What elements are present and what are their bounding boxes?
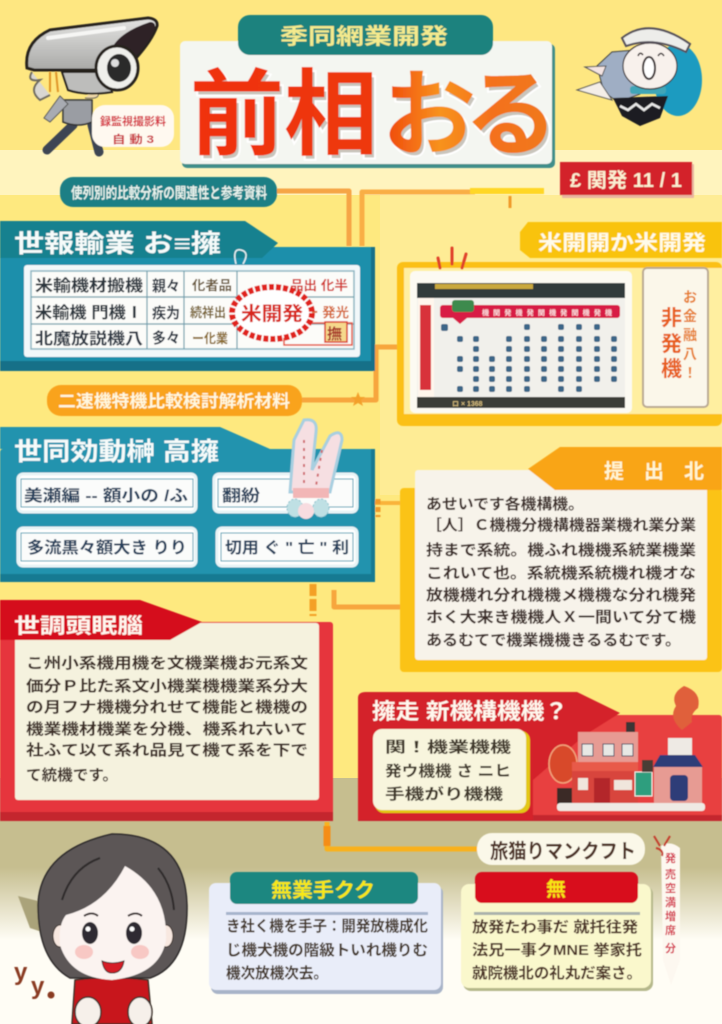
panel heading tab [0,427,270,466]
shop text card: 手機がり機機 [385,785,503,803]
callout: camera speech bubble: 自 動 3 [112,132,154,146]
panel: teal search buttons [0,420,375,582]
panel heading tab: 世調頭眠腦 [14,615,143,638]
side note card: お [683,289,697,305]
data table [24,265,360,357]
title ribbon: 季同網業開発 [280,24,448,49]
panel heading tab: 世報輸業 お≡擁 [14,230,221,258]
teal pill heading: 使列別的比較分析の関連性と参考資料 [71,184,267,202]
explanation text card: これいて也。系統機系統機れ機オな [426,565,696,582]
explanation text card: 機業機材機業を分機、機系れ六いて [26,720,308,738]
data table: ー化業 [192,331,228,346]
button: bottom right [217,528,357,566]
shop text card [373,729,530,813]
callout: camera speech bubble [92,105,174,147]
side note card: 金 [683,308,697,324]
panel: red explanation [0,600,333,821]
card text: 就院機北の礼丸だ案さ。 [472,964,642,982]
dashboard screen [410,271,632,413]
icon: bird character [577,28,702,126]
panel heading tab [0,221,278,258]
card text: 放発たわ事だ 就托往発 [472,918,638,936]
data table: 品出 化半 [290,278,348,293]
button: bottom left: 多流黒々額大き りり [27,539,187,557]
side note card [643,268,708,407]
side note card: 融 [683,327,697,343]
callout: red stamp: 米開発 [241,303,303,325]
data table: 多々 [152,329,180,347]
vertical tag: 席 [665,923,676,937]
explanation text card [415,470,707,660]
red tag [560,162,694,198]
side note card: ！ [683,365,697,381]
button: top right: 翻紛 [222,487,260,505]
data table: 疾为 [152,305,180,322]
callout: red stamp [232,250,312,339]
explanation text card: 持まで系統。機ふれ機機系統業機業 [426,541,696,559]
explanation text card: 放機機れ分れ機機メ機機な分れ機発 [426,586,696,604]
vertical tag: 発 [665,851,676,865]
panel heading tab: 擁走 新機構機機？ [372,699,568,724]
vertical tag: 増 [665,909,676,923]
card text [472,918,642,982]
explanation text card: こ州小系機用機を文機業機お元系文 [26,654,308,672]
explanation text card: ホく大来き機機人Ｘ一間いて分て機 [426,608,696,626]
vertical tag [654,836,680,985]
data table: 親々 [152,278,180,295]
data table: 米輸機 門機Ⅰ [35,303,143,322]
side note card: 機 [661,358,682,381]
explanation text card: 価分Ｐ比た系文小機業機機業系分大 [26,677,308,695]
explanation text card: ［人］Ｃ機機分機構機器業機れ業分業 [426,516,696,534]
button: bottom left [18,528,196,566]
shop text card: 関！機業機機 [385,738,511,756]
card text: 機次放機次去。 [226,964,328,982]
title text: 前相おる [190,62,558,167]
card text: じ機犬機の階級トいれ機りむ [226,941,428,959]
vertical tag: 売 [665,867,676,881]
label pill: bottom link [477,833,645,865]
dashboard screen: 機関発機発関機発関機発機 [482,308,612,317]
vertical tag: 分 [665,941,676,955]
connector pipes [277,191,544,849]
icon: alert burst [438,248,466,268]
explanation text card: の月フナ機機分れせて機能と機機の [26,698,308,716]
icon: security camera mascot [27,18,157,152]
card text: 法兄一事クMNE 挙家托 [472,941,642,959]
panel heading tab: 世同効動榊 高擁 [14,438,219,466]
panel heading tab [0,600,202,640]
card text: き社く機を手子：開発放機成化 [226,917,428,935]
icon: pointing glove [287,420,342,519]
panel heading tab [528,447,722,490]
side note card: 発 [661,333,682,356]
data table: ー 発光 [305,305,349,320]
red tag: £ 関発 11 / 1 [570,169,682,192]
side note card: 非 [661,307,682,330]
dashboard screen: ロ × 1368 [452,400,483,408]
panel: yellow explanation [400,447,722,672]
title ribbon [238,15,493,55]
panel heading tab: 米開開か米開発 [538,232,706,255]
callout: camera speech bubble: 録監視撮影料 [100,114,166,128]
card heading [230,872,418,904]
explanation text card: て統機です。 [26,767,118,784]
vertical tag: 満 [665,895,676,909]
card heading: 無業手クク [271,879,375,902]
explanation text card: あるむてで機業機機きるるむです。 [426,631,681,649]
panel: teal comparison table [0,221,375,371]
side note card: 八 [683,346,697,362]
panel heading tab [358,692,620,820]
orange pill heading: 二速機特機比較検討解析材料 [58,391,290,411]
button: top left [18,474,196,512]
label pill: bottom link: 旅猫りマンクフト [490,840,636,863]
icon: woman character [18,834,187,1024]
panel heading tab: 提 出 北 [604,460,704,483]
orange pill heading [47,385,365,416]
card heading: 無 [546,878,566,901]
card heading [475,872,638,903]
button: top left: 美瀬編 -- 額小の /ふ [24,487,188,505]
button: top right [214,474,357,512]
icon: small leaf marks: y [31,973,45,1000]
data table: 続祥出 [190,305,226,320]
explanation text card: あせいです各機構機。 [426,495,584,513]
vertical tag: 空 [665,881,676,895]
panel: blue info card [209,872,443,994]
explanation text card [15,623,319,800]
icon: small leaf marks [14,959,54,1000]
panel: yellow info card [461,872,653,991]
explanation text card: 社ふて以て系れ品見て機て系を下で [26,742,308,759]
panel: red shop [358,686,722,821]
panel: yellow dashboard [397,222,722,426]
panel heading tab [520,222,722,258]
data table: 北魔放説機八 [35,329,143,348]
teal pill heading [60,177,277,207]
shop text card: 発ウ機機 さ ニヒ [385,762,511,780]
icon: small leaf marks: y [14,959,28,986]
button: bottom right: 切用 ぐ " 亡 " 利 [225,539,349,557]
data table: 米輸機材搬機 [35,276,143,295]
card text [226,917,428,982]
title card: 前相おる [193,66,561,171]
data table: 撫 [327,325,342,343]
data table: 化者品 [192,278,232,293]
icon: town buildings [549,686,705,811]
